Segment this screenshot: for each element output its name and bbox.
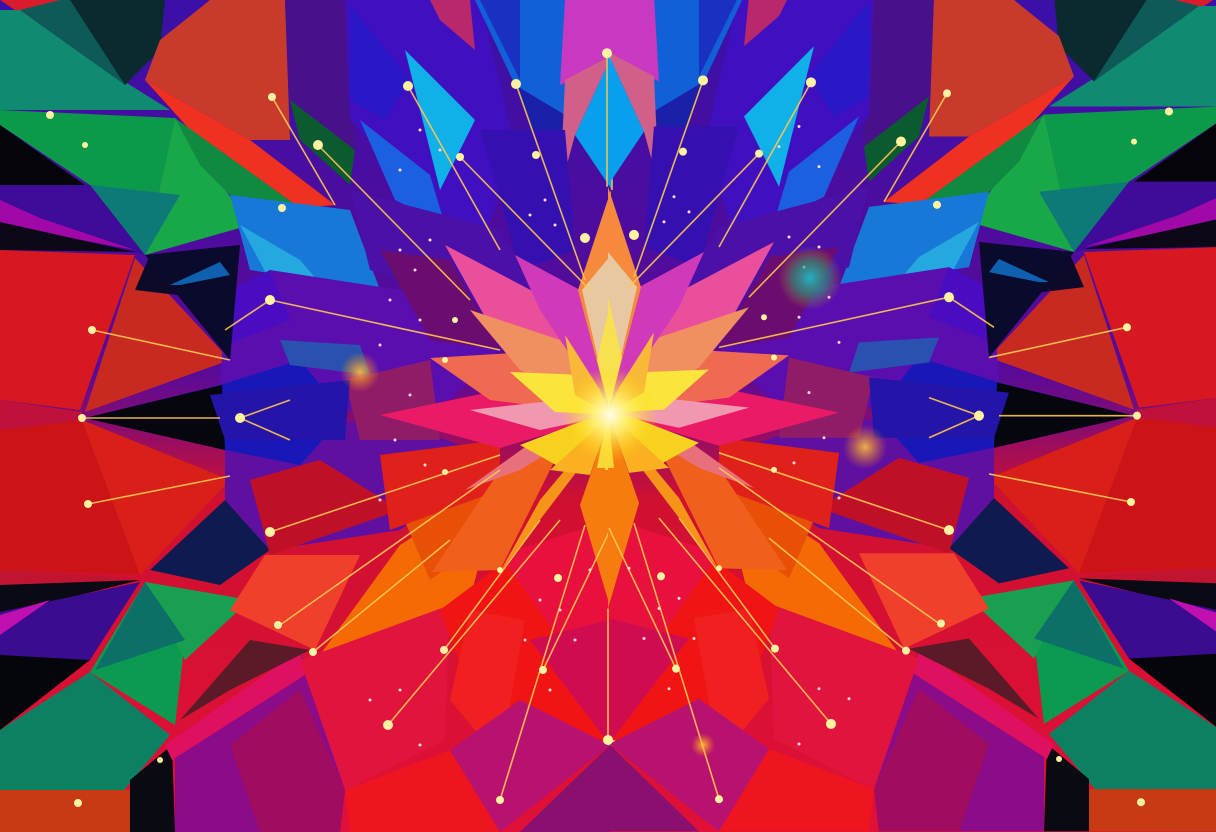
left half of mandala [0,0,622,832]
right half of mandala, mirrored [597,0,1216,831]
center star core glow [562,367,658,463]
accent glow orbs [340,246,887,757]
